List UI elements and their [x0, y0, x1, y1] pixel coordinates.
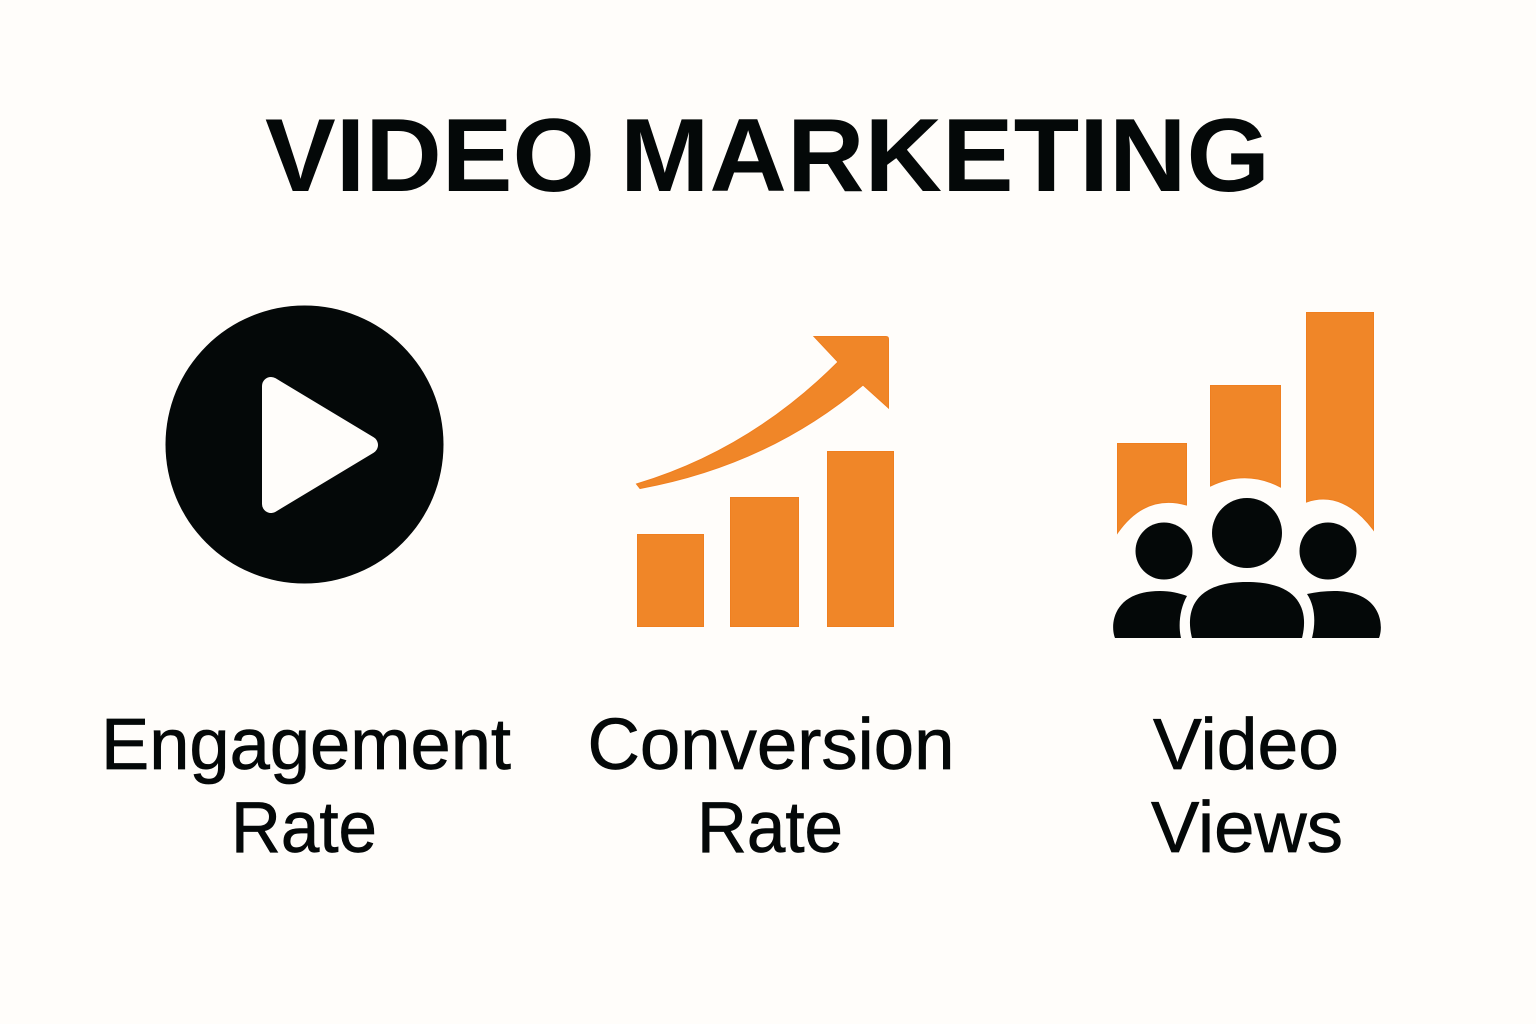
label: video views [1151, 705, 1343, 868]
title [265, 98, 1270, 214]
label: video views: Video [1153, 705, 1339, 785]
label: video views: Views [1151, 788, 1343, 868]
label: conversion rate [588, 705, 954, 868]
title: VIDEO [265, 98, 595, 214]
label: engagement rate: Rate [231, 788, 377, 868]
icon: audience with bars [1113, 312, 1381, 638]
title: MARKETING [620, 98, 1270, 214]
label: engagement rate [101, 705, 511, 868]
icon: growth bars with arrow [636, 336, 894, 626]
label: engagement rate: Engagement [101, 705, 511, 785]
label: conversion rate: Rate [697, 788, 843, 868]
label: conversion rate: Conversion [588, 705, 954, 785]
icon: play button [166, 306, 444, 584]
